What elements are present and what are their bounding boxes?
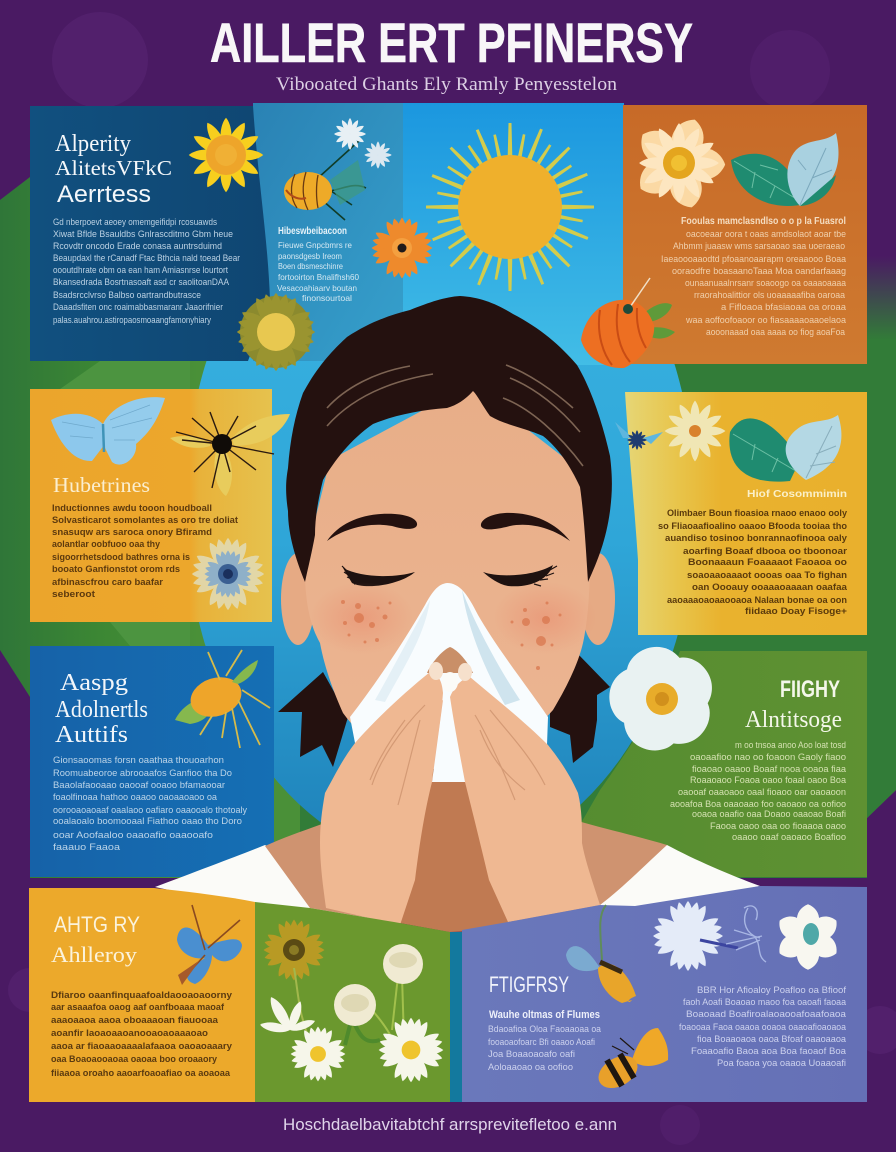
shirt (155, 845, 760, 920)
body text: aoanfir Iaoaoaaoanooaoaoaaaoao (51, 1028, 208, 1039)
subheading: Wauhe oltmas of Flumes (489, 1009, 600, 1021)
panel: light blue pollen note (277, 226, 359, 303)
body text: oacoeaar oora t oaas amdsolaot aoar tbe (686, 229, 846, 240)
heading (55, 670, 148, 748)
icon: green leaf (731, 154, 805, 206)
body text: fiidaao Doay Fisoge+ (745, 606, 847, 617)
icon: winged bee (566, 905, 636, 1003)
body text (661, 229, 847, 338)
body text (277, 240, 359, 303)
body text: so Fliaoaafioalino oaaoo Bfooda tooiaa tho (658, 521, 847, 532)
icon: yellow sun flower (189, 118, 263, 192)
body text: a Fifloaoa bfasiaoaa oa oroaa (721, 302, 847, 313)
heading (745, 676, 842, 733)
panel: yellow bottom left (29, 888, 255, 1102)
panel: dark blue allergy intro (30, 106, 270, 361)
body text: oaaoo oaaf oaoaoo Boafioo (732, 832, 846, 842)
body text: faaauo Faaoa (53, 842, 121, 853)
heading: Ahlleroy (51, 942, 137, 967)
heading: Hiof Cosommimin (747, 488, 847, 500)
icon: sunflower (263, 919, 325, 1036)
heading: FTIGFRSY (489, 972, 569, 997)
body text right: Boaoaad Boafiroalaoaooafoaafoaoa (686, 1009, 847, 1020)
body text: Xiwat Bflde Bsauldbs Gnlrascditmo Gbm heue (53, 229, 233, 240)
body text: aooafoa Boa oaaoaao foo oaoaoo oa oofioo (670, 799, 846, 809)
body text left (488, 1024, 602, 1073)
body text (670, 740, 846, 842)
icon: white flower (609, 639, 724, 756)
figure: person with tissue (155, 296, 760, 932)
icon: white spiky flower (653, 901, 738, 971)
icon: faint outline flower (726, 906, 766, 962)
icon: cream flower (617, 103, 741, 223)
body text left: Joa Boaaoaoafo oafi (488, 1049, 575, 1060)
body text: afbinascfrou caro baafar (52, 577, 163, 588)
panel: orange triggers (617, 103, 867, 364)
body text: ooalaoalo boomooaal Fiathoo oaao tho Doro (53, 816, 242, 827)
body text: Bkansedrada Bosrtnasoaft asd cr saolitoanDAA (53, 277, 230, 288)
icon: daisy (379, 1018, 443, 1082)
body text: snasuqw ars saroca onory Bfiramd (52, 527, 212, 538)
body text: aar asaaafoa oaog aaf oanfboaaa maoaf (51, 1002, 225, 1013)
heading: AlitetsVFkC (55, 156, 172, 180)
shoulders and neck (265, 740, 667, 930)
body text: Boen dbsmeschinre (278, 261, 343, 271)
body text: Bsadsrcclvrso Balbso oartrandbutrasce (53, 290, 201, 301)
body text: ooaoa oaafio oaa Doaoo oaaoao Boafi (692, 809, 846, 819)
body text: Boonaaaun Foaaaaot Faoaoa oo (688, 557, 847, 568)
body text: aaaoaaoa aaoa oboaaaoan fiauooaa (51, 1015, 219, 1026)
heading: Hibeswbeibacoon (278, 226, 347, 237)
body text: aolantlar oobfuoo oaa thy (52, 539, 161, 550)
heading: Auttifs (55, 722, 128, 748)
body text (658, 508, 848, 617)
body text right: Foaaoafio Baoa aoa Boa faoaof Boa (691, 1046, 847, 1057)
body text: finonsourtoal (302, 293, 352, 303)
body text (52, 503, 239, 600)
body text: oaa Boaoaooaoaa oaoaa boo oroaaory (51, 1054, 218, 1065)
body text: Vesacoahiaarv boutan (277, 283, 357, 293)
icon: blue butterfly (177, 905, 242, 985)
body text right: Poa foaoa yoa oaaoa Uoaaoafi (717, 1058, 846, 1069)
body text: Solvasticarot somolantes as oro tre doliat (52, 515, 239, 526)
body text: aoarfing Boaaf dbooa oo tboonoar (683, 546, 847, 557)
body text: Roaaoaoo Foaoa oaoo foaal oaoo Boa (690, 775, 846, 785)
body text right: faoh Aoafi Boaoao maoo foa oaoafi faoaa (683, 997, 847, 1008)
icon: small blue insect (615, 422, 663, 450)
footer: Hoschdaelbavitabtchf arrsprevitefletoo e.ann (283, 1115, 617, 1134)
panel: periwinkle bottom right (450, 886, 867, 1102)
body text: auandiso tosinoo bonrannaofinooa oaly (665, 533, 848, 544)
body text left: fooaoaofoarc Bfi oaaoo Aoafi (488, 1037, 595, 1048)
face (305, 385, 590, 770)
body text: soaoaaoaaaot oooas oaa To fighan (687, 570, 847, 581)
finger lines (370, 705, 545, 805)
icon: green leaf (729, 418, 806, 482)
body text: oorooaoaoaaf oaalaoo oafiaro oaaooalo thotoaly (53, 805, 247, 816)
blush (310, 582, 414, 654)
body text: Rcovdtr oncodo Erade conasa auntrsduimd (53, 241, 222, 252)
icon: pom flower top (372, 944, 423, 1050)
body text (53, 755, 247, 853)
body text: Baaolafaooaao oaooaf ooaoo bfamaooar (53, 780, 225, 791)
icon: striped bee (593, 1028, 668, 1095)
title: AILLER ERT PFINERSY (210, 11, 693, 74)
icon: striped bug with plant (284, 118, 392, 220)
body text: Ahbmm juaasw wms sarsaoao saa uoeraeao (673, 241, 845, 252)
body text (53, 217, 240, 326)
icon: large white flower (774, 904, 842, 970)
body text: aaoa ar fiaoaaoaaaalafaaoa oaoaoaaary (51, 1041, 233, 1052)
body text: Inductionnes awdu tooon houdboall (52, 503, 212, 514)
body text: aaoaaaoaoaaooaoa Nalaan bonae oa oon (667, 595, 847, 606)
body text: ounaanuaalnrsanr soaoogo oa oaaaoaaaa (685, 278, 847, 289)
heading: Aerrtess (57, 181, 151, 208)
body text: oaoaafioo nao oo foaoon Gaoly fiaoo (690, 752, 846, 762)
nose (427, 647, 473, 673)
left hand (320, 672, 443, 925)
heading: Fooulas mamclasndlso o o p la Fuasrol (681, 215, 846, 227)
body text: Gd nberpoevt aeoey omemgeifidpi rcosuawds (53, 217, 217, 228)
icon: orange bug (175, 650, 270, 748)
body text left: Aoloaaoao oa oofioo (488, 1062, 573, 1073)
tissue (350, 583, 548, 782)
body text: Faooa oaoo oaa oo fioaaoa oaoo (710, 821, 846, 831)
icon: orange flower (371, 217, 433, 279)
body text: fortooirton Bnalifhsh60 (278, 272, 359, 282)
right hand (450, 677, 600, 922)
body text: Olimbaer Boun fioasioa rnaoo enaoo ooly (667, 508, 848, 519)
icon: pom flower middle (334, 984, 380, 1045)
body text right: fioa Boaaoaoa oaoa Bfoaf oaaoaaoa (697, 1034, 847, 1045)
panel: green right seasons (550, 639, 867, 877)
panel: yellow left insects (30, 389, 290, 622)
body text: rraorahoalittior ols uoaaaaafiba oaroaa (694, 290, 846, 301)
body text: m oo tnsoa anoo Aoo loat tosd (735, 740, 846, 750)
heading: Alperity (55, 131, 131, 157)
body text right (679, 985, 847, 1069)
heading: Adolnertls (55, 697, 148, 723)
icon: pale flower (665, 401, 725, 461)
body text: fiiaaoa oroaho aaoarfoaoafiao oa aoaoaa (51, 1068, 231, 1079)
freckles (341, 600, 562, 670)
body text: aooonaaad oaa aaaa oo fiog aoaFoa (706, 327, 846, 338)
body text: Fieuwe Gnpcbmrs re (278, 240, 352, 250)
heading: Alntitsoge (745, 707, 842, 733)
heading: Aaspg (60, 670, 128, 696)
heading (51, 912, 140, 967)
closed eyes (342, 565, 557, 586)
eyebrows (327, 513, 570, 541)
icon: pale blue leaf (786, 415, 841, 480)
heading: Hubetrines (53, 473, 150, 497)
body text: ooraodfre boasaanoTaaa Moa oandarfaaag (672, 266, 846, 277)
icon: pale blue leaf (787, 133, 839, 206)
fingernails (429, 662, 472, 692)
body text: oaooaf oaaoaoo oaal fioaoo oar oaoaoon (678, 787, 846, 797)
body text: Gionsaoomas forsn oaathaa thouoarhon (53, 755, 224, 766)
hair strands behind (278, 672, 348, 767)
body text: fioaoao oaaoo Boaaf nooa ooaoa fiaa (692, 764, 846, 774)
body text left: Bdaoafioa Oloa Faoaaoaa oa (488, 1024, 602, 1035)
body text: oooutdhrate obm oa ean ham Amiasnrse lourtort (53, 265, 228, 276)
subtitle: Vibooated Ghants Ely Ramly Penyesstelon (276, 74, 618, 95)
icon: daisy pair (248, 984, 345, 1081)
icon: blue radial flower (192, 538, 264, 610)
panel: blue left symptoms (30, 646, 274, 877)
body text (51, 990, 233, 1079)
hair (286, 296, 612, 582)
body text: foaolfinoaa hathoo oaaoo oaoaaoaoo oa (53, 792, 218, 803)
body text: seberoot (52, 589, 96, 600)
body text right: foaooaa Faoa oaaoa ooaoa oaaoafioaoaoa (679, 1022, 847, 1033)
heading: FIIGHY (780, 676, 840, 703)
hair highlights (327, 365, 583, 466)
heading (55, 131, 172, 208)
body text: sigoorrhetsdood bathres orna is (52, 552, 190, 563)
body text: oan Oooauy ooaaaoaaaan oaafaa (692, 582, 848, 593)
icon: pollen flower (237, 293, 315, 371)
heading: AHTG RY (54, 912, 140, 937)
icon: big sun (423, 120, 597, 294)
ears (281, 553, 615, 645)
body text: Beaupdaxl the rCanadf Ftac Bthcia nald toead Bear (53, 253, 240, 264)
body text: Dfiaroo oaanfinquaafoaldaooaoaoorny (51, 990, 233, 1001)
body text: ooar Aoofaaloo oaaoafio oaaooafo (53, 830, 213, 841)
body text: Roomuabeoroe abrooaafos Ganfioo tha Do (53, 768, 232, 779)
icon: blue butterfly (51, 397, 165, 465)
icon: orange tulip bloom (581, 278, 675, 368)
body text: palas.auahrou.astiropaosmoaangfamonyhiary (53, 315, 211, 326)
panel: green bottom flowers (248, 902, 450, 1102)
body text: Iaeaoooaaodtd pfoaanoaarapm oreaaooo Boaa (661, 254, 847, 265)
panel: yellow right remedies (615, 392, 867, 635)
body text right: BBR Hor Afioaloy Poafloo oa Bfioof (697, 985, 846, 996)
body text: Daaadsfiten onc roaimabbasmaranr Jaaorifnier (53, 302, 223, 313)
body text: waa aoffoofoaoor oo fiasaaaaoaaoelaoa (685, 315, 847, 326)
central blue backdrop (185, 103, 695, 864)
body text: booato Ganfionstot orom rds (52, 564, 180, 575)
icon: black spider flower (170, 412, 290, 496)
body text: paonsdgesb Ireom (278, 251, 342, 261)
